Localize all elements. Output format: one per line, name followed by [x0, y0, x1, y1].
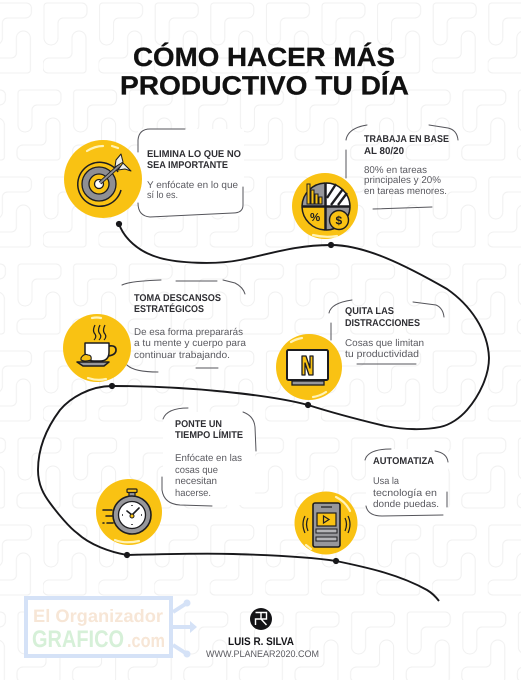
panel: automatiza	[365, 449, 448, 516]
road line connecting the steps	[38, 221, 489, 601]
heading: ponte: TIEMPO LÍMITE	[175, 429, 243, 441]
text: elimina: sí lo es.	[147, 190, 178, 201]
text: quita: tu productividad	[345, 349, 419, 360]
text: quita: Cosas que limitan	[345, 338, 424, 349]
heading: trabaja: AL 80/20	[364, 146, 405, 157]
icon: coffee cup	[63, 314, 131, 382]
watermark: El Organizador	[33, 606, 163, 626]
text: elimina	[147, 180, 239, 201]
footer name: LUIS R. SILVA	[228, 636, 294, 648]
text: trabaja	[364, 165, 447, 197]
icon: pie chart and coins: %	[310, 212, 320, 224]
title: CÓMO HACER MÁS	[133, 42, 395, 72]
footer website: WWW.PLANEAR2020.COM	[206, 649, 319, 660]
text: trabaja: en tareas menores.	[364, 186, 447, 197]
text: ponte: Enfócate en las	[175, 453, 242, 464]
heading: toma: ESTRATÉGICOS	[134, 303, 204, 315]
watermark: GRAFICO	[32, 626, 124, 653]
heading: elimina: ELIMINA LO QUE NO	[147, 149, 241, 160]
heading: elimina	[147, 149, 241, 171]
text: quita	[345, 338, 424, 360]
panel: trabaja	[346, 125, 458, 209]
text: automatiza: donde puedas.	[373, 499, 439, 510]
text: ponte: cosas que	[175, 465, 219, 476]
panel: toma	[122, 280, 247, 372]
text: automatiza	[373, 476, 439, 510]
heading: trabaja: TRABAJA EN BASE	[364, 134, 449, 145]
text: toma: continuar trabajando.	[134, 350, 230, 361]
watermark: .com	[127, 631, 165, 652]
title	[120, 42, 409, 100]
text: ponte: hacerse.	[175, 488, 211, 499]
icon: pie chart and coins	[292, 173, 358, 239]
heading: automatiza: AUTOMATIZA	[373, 456, 434, 467]
text: automatiza: tecnología en	[373, 488, 437, 499]
icon: phone with video	[294, 492, 358, 554]
text: trabaja: 80% en tareas	[364, 165, 427, 176]
icon: pie chart and coins: $	[336, 214, 342, 228]
heading: elimina: SEA IMPORTANTE	[147, 160, 228, 171]
text: toma	[134, 327, 247, 361]
heading: ponte	[175, 419, 243, 441]
text: ponte: necesitan	[175, 476, 217, 487]
text: elimina: Y enfócate en lo que	[147, 180, 239, 191]
heading: trabaja	[364, 134, 449, 157]
text: toma: De esa forma prepararás	[134, 327, 243, 338]
text: toma: a tu mente y cuerpo para	[134, 338, 247, 349]
icon: television	[276, 334, 342, 400]
panel: ponte	[162, 408, 256, 506]
title: PRODUCTIVO TU DÍA	[120, 70, 409, 100]
footer logo	[250, 608, 272, 630]
watermark	[26, 598, 197, 658]
heading: quita	[345, 306, 420, 329]
icon: target	[64, 140, 142, 218]
heading: toma	[134, 293, 221, 315]
heading: quita: DISTRACCIONES	[345, 318, 420, 329]
text: automatiza: Usa la	[373, 476, 400, 487]
heading: ponte: PONTE UN	[175, 419, 222, 430]
icon: stopwatch	[96, 479, 162, 545]
panel: quita	[329, 300, 444, 364]
text: trabaja: principales y 20%	[364, 175, 441, 186]
heading: toma: TOMA DESCANSOS	[134, 293, 221, 304]
panel: elimina	[138, 129, 244, 217]
heading: quita: QUITA LAS	[345, 306, 394, 317]
text: ponte	[175, 453, 242, 499]
